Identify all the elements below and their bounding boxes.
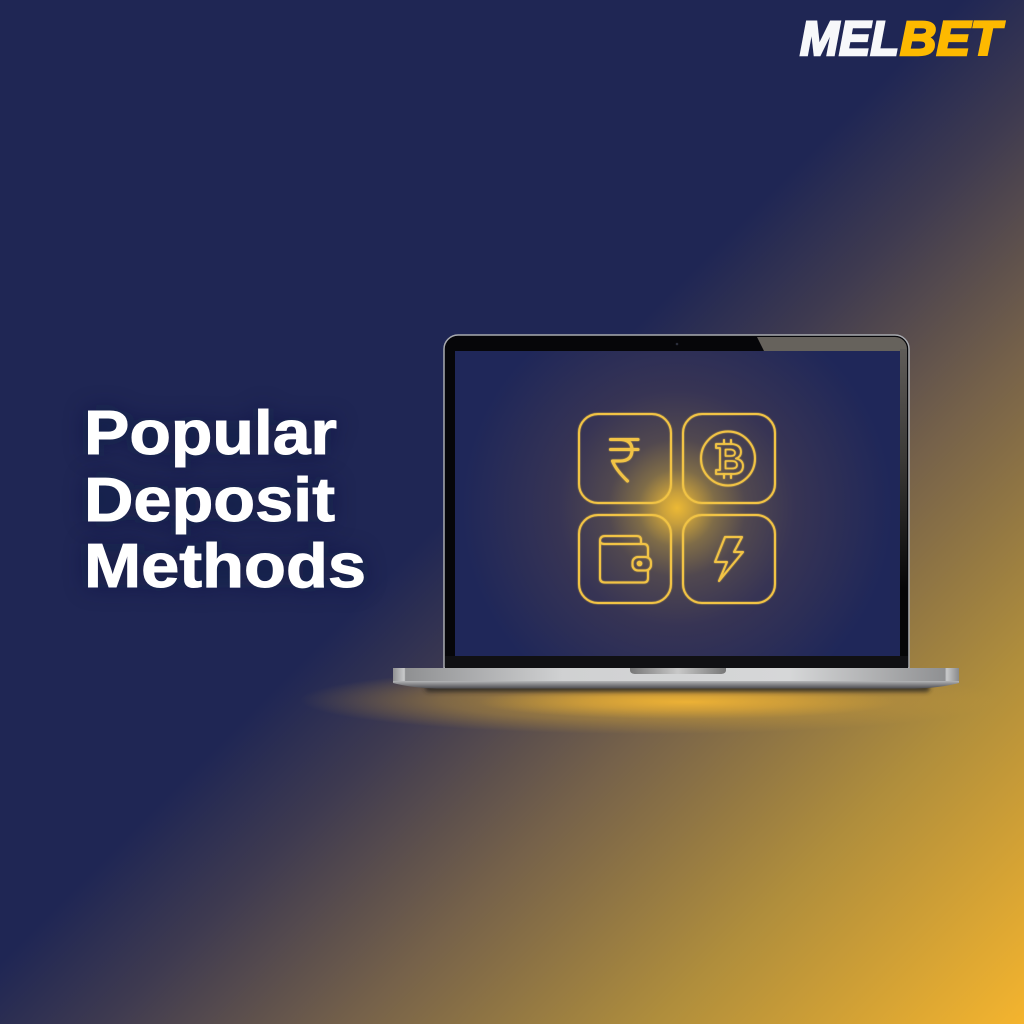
icon: wallet card xyxy=(579,515,671,603)
title: Popular Deposit Methods: Deposit xyxy=(84,466,335,535)
logo: MELBET xyxy=(800,13,1005,66)
right bezel reflection xyxy=(900,349,907,668)
icon: bitcoin card xyxy=(683,414,775,503)
payment icons grid xyxy=(579,414,775,603)
logo: MELBET: MEL xyxy=(800,13,899,66)
screen with glow xyxy=(455,351,900,656)
laptop base shadow xyxy=(425,684,930,692)
icon: lightning card xyxy=(683,515,775,603)
lid reflection xyxy=(757,337,907,351)
camera dot xyxy=(676,343,678,345)
title: Popular Deposit Methods: Methods xyxy=(84,532,366,601)
bottom bezel xyxy=(445,656,908,668)
title: Popular Deposit Methods xyxy=(84,399,366,601)
base lower edge xyxy=(393,681,959,688)
title: Popular Deposit Methods: Popular xyxy=(84,399,337,468)
title: Popular Deposit Methods: Popular xyxy=(84,399,337,468)
logo: MELBET: BET xyxy=(900,13,1005,66)
icon: rupee card xyxy=(579,414,671,503)
glow under laptop xyxy=(300,666,1000,734)
title: Popular Deposit Methods: Methods xyxy=(84,532,366,601)
title: Popular Deposit Methods: Deposit xyxy=(84,466,335,535)
laptop lid frame xyxy=(444,335,909,668)
base notch xyxy=(630,668,726,674)
laptop xyxy=(393,335,959,692)
laptop base xyxy=(393,668,959,681)
